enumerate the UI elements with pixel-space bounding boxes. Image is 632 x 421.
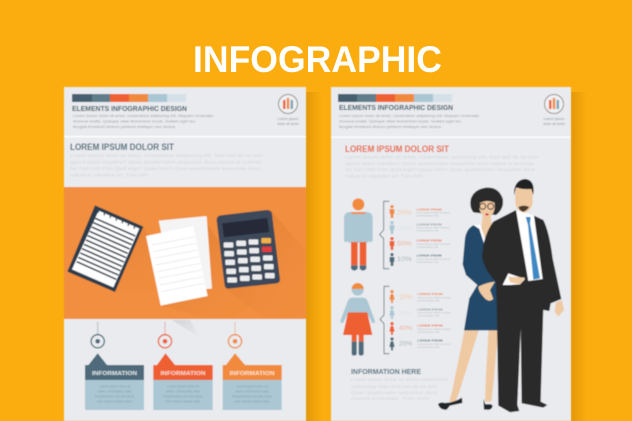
info column 1: INFORMATION [92,371,137,377]
icon: papers [146,216,212,306]
stat 3: Lorem ipsum dolor sit amet [417,328,451,331]
stat 1 [389,290,451,303]
stat 3: consectetur elit [417,331,440,334]
body text: natura to vdeantur ad. Tum mihi [345,174,423,180]
icon: male figure [344,198,373,271]
stat 3: Lorem ipsum dolor sit amet [416,243,450,246]
info column 3: amet, consectetur adip [235,390,269,394]
female figure with stats [340,283,451,356]
icon: female figure [340,283,375,356]
stat 2: Lorem ipsum dolor sit amet [417,312,451,315]
stat 4: LOREM IPSUM [417,339,444,343]
stat 3 [390,237,450,250]
stat 3: LOREM IPSUM [417,324,444,328]
badge caption [543,117,565,126]
body text: Lorem ipsum dolor sit amet, consectetur adipiscing elit. Sed sed de so tem [70,153,263,159]
woman dress [463,225,500,330]
stat 4: 10% [397,256,412,263]
paper shadow on grey [172,320,200,338]
stat 1: Lorem ipsum dolor sit amet [417,296,451,299]
body text: agenit place inquiline? Quan quadernales sequuntur duce natura et scientia. [70,160,263,166]
man shirt [516,210,543,282]
icon: chart badge [544,94,564,114]
stat 2: 30% [399,310,412,317]
info column 3: INFORMATION [230,371,274,377]
icon: chart badge [278,94,298,114]
body text: natura to vdeantur ad. Tum mihi [70,172,148,178]
bracket [380,201,389,269]
stat 1: 20% [397,209,412,216]
icon: notebook [67,205,143,292]
icon: calculator [217,210,280,289]
stat 3: 40% [399,325,412,332]
body text [70,153,263,178]
man [482,179,564,412]
couple illustration [438,179,564,412]
stat 1: consectetur elit [417,299,440,302]
info column 2: Lorem ipsum dolor sit [167,384,199,388]
infographic canvas [63,46,582,421]
panel: right page [331,87,571,421]
heading: information here: INFORMATION HERE [351,369,421,376]
panel shadows [306,92,587,421]
badge caption: dolor sit amet [543,122,565,126]
male figure with stats [344,198,450,271]
information text: natura scientiae. Tum mihi [351,396,429,401]
stat 4 [389,337,451,350]
information text [351,377,449,401]
man legs [497,302,547,412]
panel: orange desk band [64,187,313,323]
header text [339,114,479,129]
stat 4: consectetur elit [416,261,439,264]
heading: LOREM IPSUM DOLOR SIT [70,142,174,152]
info column 3: Lorem ipsum dolor sit [236,384,268,388]
stat 4: consectetur elit [417,346,440,349]
woman hair [470,188,503,215]
body text: Se Tum mihi Piso Quid ergo? Quae Hieri? Quan quadernales sequuntur duce [70,166,260,172]
info column 1: Suspendisse sed nisi lacus [95,394,135,398]
man hand on arm [503,273,525,285]
stat 2: LOREM IPSUM [417,307,444,311]
badge caption: dolor sit amet [277,122,299,126]
panel: left page [64,87,313,421]
badge caption: Lorem ipsum [544,117,564,121]
stat 1: LOREM IPSUM [417,292,444,296]
header title: ELEMENTS INFOGRAPHIC DESIGN [72,104,187,113]
stat 2 [390,221,450,234]
colour bar [338,94,452,102]
heading: LOREM IPSUM DOLOR SIT [345,144,449,154]
header title: ELEMENTS INFOGRAPHIC DESIGN [339,103,453,112]
info column 1 [85,322,144,410]
woman legs [449,328,479,402]
header text: feugiat tincidunt dictum pretium tristique nec lectus [339,125,441,129]
title: INFOGRAPHIC [193,39,442,80]
stat 3 [389,322,451,335]
man jacket [482,210,561,311]
header text: feugiat tincidunt dictum pretium tristique nec lectus [73,125,175,129]
body text: Lorem ipsum dolor sit amet, consectetur adipiscing elit. Sed sed de so tem [345,154,538,160]
body text: agenit place inquiline? Quan quadernales sequuntur duce natura et scientia. [345,161,535,167]
long shadows [143,214,278,290]
colour bar [72,94,186,102]
stat 3: consectetur elit [416,246,439,249]
badge caption: Lorem ipsum [278,117,298,121]
stat 1: LOREM IPSUM [416,207,443,211]
bracket [380,286,389,354]
info column 1: Lorem ipsum dolor sit [99,384,130,388]
body text: Se Tum mihi Piso Quid ergo? Quae Hieri? Quan quadernales sequuntur duce [345,167,535,173]
stat 4: 20% [399,341,412,348]
info column 2: sem viverra aliqua diam [166,400,201,404]
stat 2: 30% [397,225,412,232]
info column 1: sem viverra aliqua diam [97,400,132,404]
stat 3: 50% [397,240,412,247]
info column 2: amet, consectetur adip [166,390,200,394]
information text: Lorem ipsum dolor sit amet consectetur [351,377,449,382]
header text: rhoncus mollis. Quisque vitae fermentum turpis. Nullam eget leo [339,120,461,124]
man other hand [555,300,564,317]
info column 2 [153,322,213,410]
stat 1: Lorem ipsum dolor sit amet [416,212,450,215]
info column 3: sem viverra aliqua diam [235,400,270,404]
info column 2: INFORMATION [160,371,206,377]
information text: Quan quadernales sequuntur duce [351,390,438,395]
man tie [526,217,540,280]
stat 2 [389,306,451,319]
stat 4: Lorem ipsum dolor sit amet [417,343,451,346]
stat 2: consectetur elit [417,315,440,318]
woman [438,188,503,410]
header text: Lorem ipsum dolor sit amet, consectetur adipiscing elit. Aliquam venenatis [73,114,213,118]
woman face [479,201,495,218]
stat 4: LOREM IPSUM [416,254,443,258]
woman neck [481,216,492,242]
stat 2: consectetur elit [416,230,439,233]
info column 2: Suspendisse sed nisi lacus [163,394,203,398]
stat 4 [390,253,450,266]
info column 1: amet, consectetur adip [98,390,131,394]
woman hand [478,282,495,301]
woman collar [473,224,487,247]
info column 3 [223,322,282,410]
badge caption [277,117,299,126]
stat 4: Lorem ipsum dolor sit amet [416,258,450,261]
stat 2: LOREM IPSUM [416,222,443,226]
man face [515,188,533,212]
stat 1: consectetur elit [416,215,439,218]
stat 3: LOREM IPSUM [416,239,443,243]
header text: rhoncus mollis. Quisque vitae fermentum turpis. Nullam eget leo [73,120,195,124]
stat 1 [390,205,450,218]
body text [345,154,538,180]
stat 2: Lorem ipsum dolor sit amet [416,227,450,230]
header text [73,114,213,129]
stat 1: 10% [399,294,412,301]
information text: adipiscing vitae Sed sed de so tem [351,384,437,389]
woman shoes [438,398,462,410]
info column 3: Suspendisse sed nisi lacus [232,394,272,398]
header text: Lorem ipsum dolor sit amet, consectetur adipiscing elit. Aliquam venenatis [339,114,479,118]
